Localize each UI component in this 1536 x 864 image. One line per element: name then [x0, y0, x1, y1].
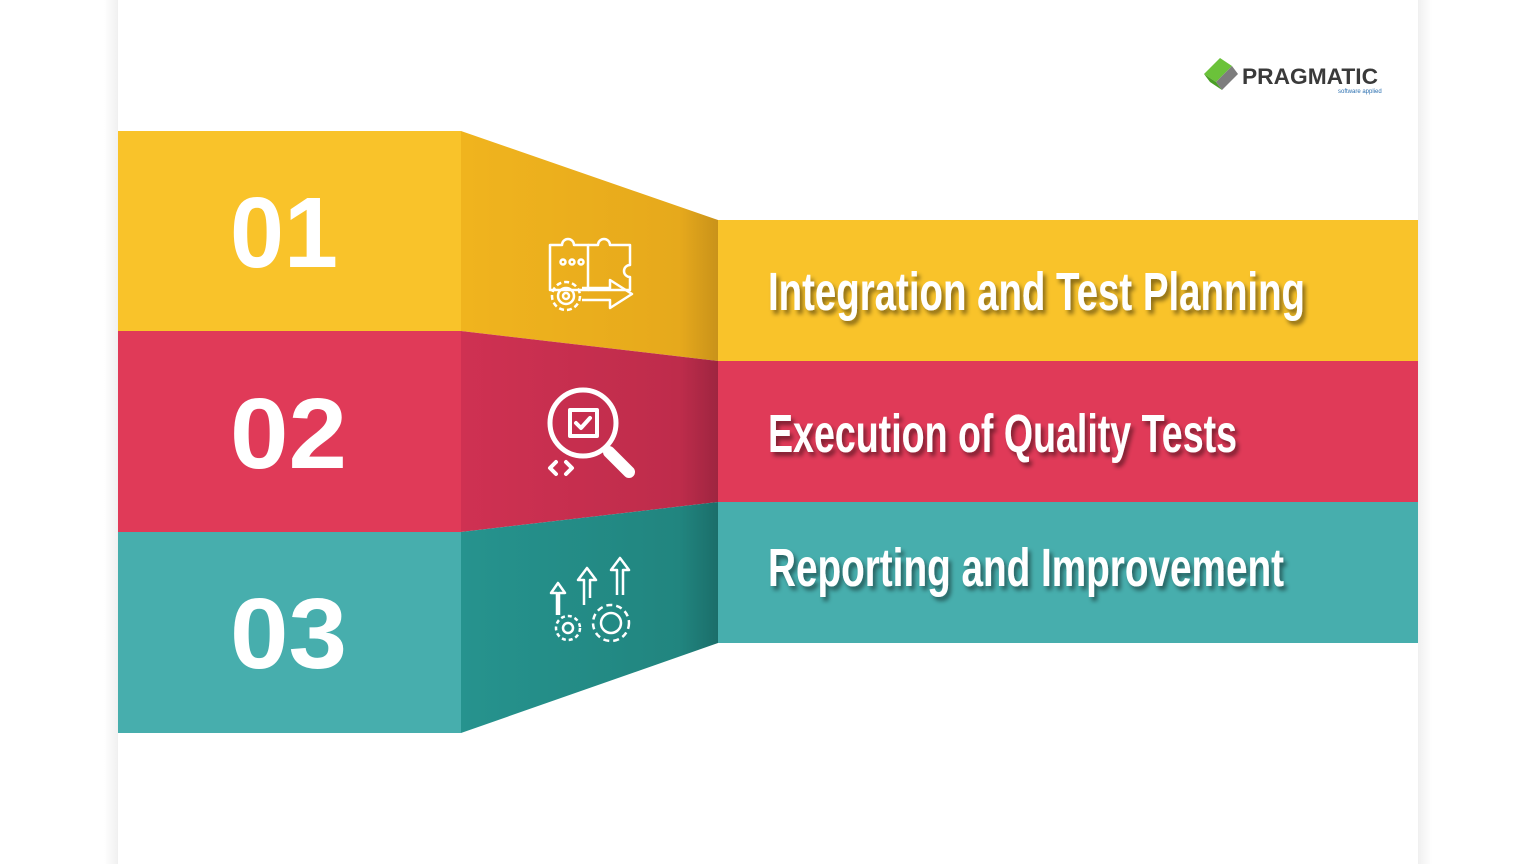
panel: step 02: Execution of Quality Tests: [768, 404, 1237, 464]
logo: PRAGMATIC: [1242, 64, 1378, 89]
panel: step 01: 01: [230, 177, 338, 289]
panel: step 02: 02: [230, 378, 347, 490]
panel: step 02: [118, 331, 1418, 532]
logo: [1204, 58, 1382, 95]
panel: step 01: [118, 131, 1418, 361]
panel: step 03: 03: [230, 578, 347, 690]
panel: step 03: [118, 502, 1418, 733]
panel: step 01: Integration and Test Planning: [768, 262, 1305, 322]
panel: step 03: Reporting and Improvement: [768, 538, 1284, 598]
logo: software applied: [1338, 89, 1382, 95]
